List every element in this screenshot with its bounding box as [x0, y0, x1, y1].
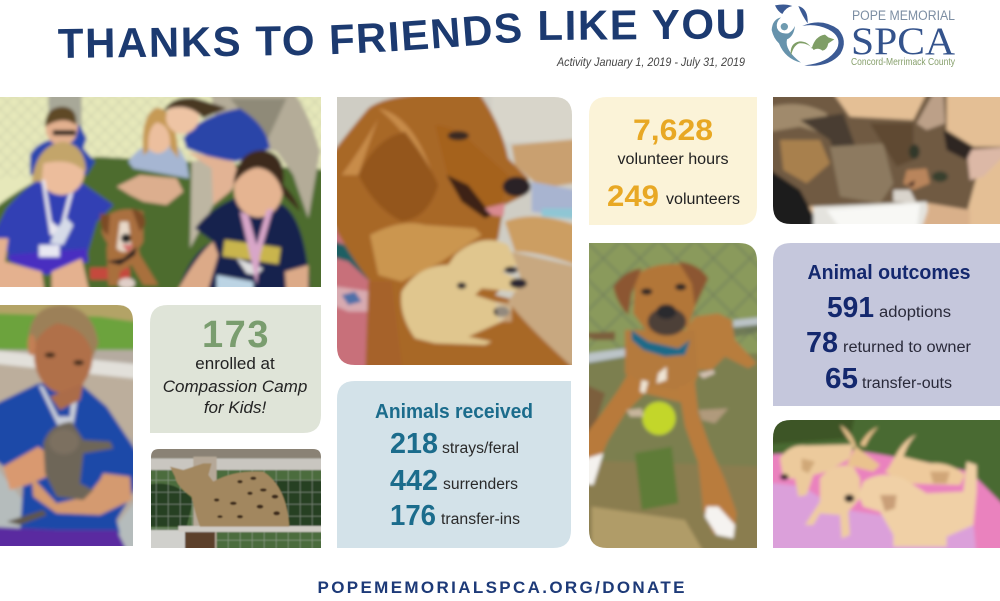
logo: Pope Memorial SPCA	[772, 4, 956, 68]
stat: strays/feral	[390, 428, 519, 460]
stat: transfer-outs: transfer-outs	[862, 375, 952, 392]
stat: returned to owner: 78	[806, 327, 838, 359]
photo: puppies in pink pool	[773, 420, 1000, 548]
stat: transfer-outs: 65	[825, 363, 858, 395]
stat: adoptions: 591	[827, 292, 874, 324]
label: volunteers: volunteers	[666, 191, 740, 208]
stat: returned to owner	[806, 327, 971, 359]
label: enrolled at Compassion Camp for Kids: for Kids!	[204, 398, 266, 417]
photo: girl holding kitten	[0, 305, 133, 546]
heading: Animals received: Animals received	[375, 401, 533, 423]
stat: surrenders: surrenders	[443, 476, 518, 493]
title: THANKS TO FRIENDS LIKE YOU	[58, 9, 744, 58]
number: 249: 249	[607, 180, 659, 213]
logo text: county: Concord-Merrimack County	[851, 56, 956, 68]
label: enrolled at Compassion Camp for Kids	[163, 354, 307, 417]
label: enrolled at Compassion Camp for Kids: Compassion Camp	[163, 377, 307, 396]
stat: adoptions	[827, 292, 951, 324]
logo text: organisation name: POPE MEMORIAL	[852, 8, 955, 23]
stat: surrenders: 442	[390, 465, 438, 497]
heading: Animal outcomes: Animal outcomes	[808, 262, 970, 284]
number: 7,628: 7,628	[633, 114, 713, 147]
logo text: SPCA: SPCA	[851, 20, 955, 63]
footer: donation URL: POPEMEMORIALSPCA.ORG/DONATE	[318, 578, 684, 597]
label: enrolled at Compassion Camp for Kids: enrolled at	[195, 354, 275, 373]
panel: Animal outcomes	[773, 243, 1000, 406]
photo: golden retriever with puppies	[337, 97, 572, 365]
stat: strays/feral: 218	[390, 428, 438, 460]
panel: Animals received	[337, 381, 571, 548]
stat: transfer-ins: 176	[390, 500, 436, 532]
photo: tabby cat	[773, 97, 1000, 224]
stat: adoptions: adoptions	[879, 304, 951, 321]
stat: transfer-ins: transfer-ins	[441, 511, 520, 528]
stat: returned to owner: returned to owner	[843, 339, 971, 356]
stat: surrenders	[390, 465, 518, 497]
stat: transfer-outs	[825, 363, 952, 395]
icon: logo mark	[772, 4, 844, 66]
panel: Compassion Camp enrolment	[150, 305, 321, 433]
stat: strays/feral: strays/feral	[442, 440, 519, 457]
label: volunteer hours: volunteer hours	[618, 151, 729, 168]
panel: volunteers	[589, 97, 757, 225]
photo: tan dog with tennis ball	[589, 243, 757, 548]
activity date range: Activity January 1, 2019 - July 31, 2019	[556, 57, 746, 69]
photo: spotted cat on shelf	[151, 449, 321, 548]
number: 173: 173	[202, 314, 270, 356]
stat: transfer-ins	[390, 500, 520, 532]
photo: kids with dog	[0, 97, 321, 287]
